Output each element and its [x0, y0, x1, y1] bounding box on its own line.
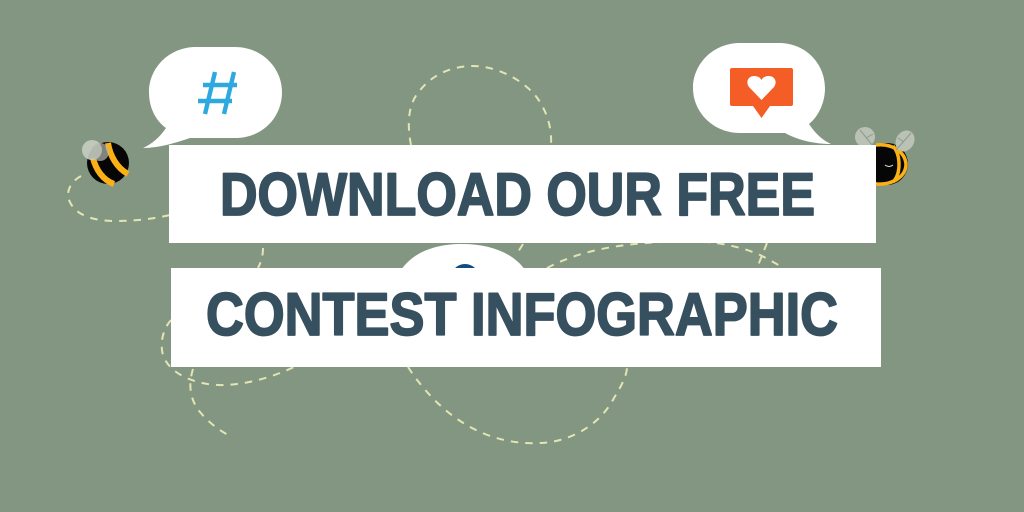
- flight path: left upper stroke: [258, 248, 263, 268]
- flight path: bottom loop: [408, 367, 627, 443]
- banner: contest infographic: CONTEST INFOGRAPHIC: [206, 281, 838, 348]
- bee: right: [855, 127, 918, 185]
- banner: download our free: DOWNLOAD OUR FREE: [220, 161, 815, 228]
- flight path: short centre stroke: [518, 244, 523, 252]
- flight path: right crossing stroke: [757, 243, 767, 268]
- flight path: lower left tail: [190, 369, 232, 437]
- icon: heart notification: [730, 68, 793, 118]
- speech bubble: hashtag: [143, 47, 282, 148]
- speech bubble: heart notification: [693, 43, 831, 144]
- flight path: lower left loop: [162, 320, 294, 385]
- icon: partly hidden blue circle: [450, 264, 480, 293]
- flight path: top loop: [409, 66, 551, 145]
- flight path: left bee trail: [68, 176, 170, 221]
- icon: hashtag: [198, 72, 237, 114]
- banner: contest infographic: [171, 268, 881, 367]
- speech bubble: hidden behind banners: [401, 244, 525, 293]
- flight path: right arc: [547, 241, 783, 268]
- bee: left: [82, 140, 129, 184]
- banner: download our free: [169, 145, 876, 243]
